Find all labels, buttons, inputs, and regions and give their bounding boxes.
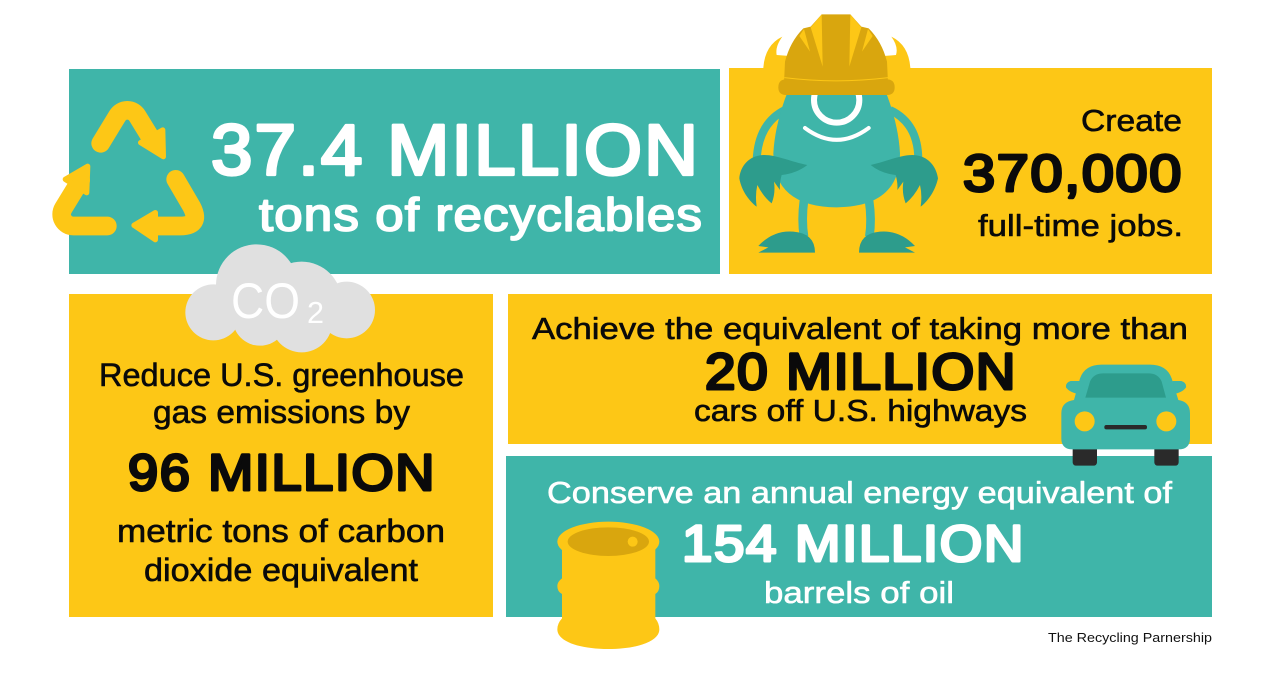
hard hat: [784, 14, 888, 83]
text: reduce emissions line 1: Reduce U.S. greenhouse: [99, 357, 464, 393]
text: conserve energy: Conserve an annual energy equivalent of: [547, 475, 1172, 510]
eye: [814, 77, 859, 123]
heading: 20 million: 20 MILLION: [705, 343, 1017, 400]
text: subscript 2: 2: [307, 295, 324, 330]
arms: [757, 110, 785, 160]
feet: [758, 232, 815, 253]
text: dioxide equivalent: dioxide equivalent: [144, 552, 418, 588]
hands: [739, 155, 807, 207]
text: tons of recyclables: tons of recyclables: [259, 188, 703, 240]
panel: recyclables: [62, 69, 720, 274]
text: metric tons: metric tons of carbon: [117, 513, 445, 549]
panel: cars: [508, 294, 1212, 444]
text: achieve the equivalent: Achieve the equivalent of taking more than: [532, 311, 1188, 346]
legs: [803, 200, 804, 237]
icon: oil barrel: [557, 522, 659, 649]
text: reduce emissions line 2: gas emissions by: [153, 394, 410, 430]
panel: jobs: [729, 68, 1212, 274]
text: CO: CO: [231, 273, 300, 329]
grille: [1104, 425, 1147, 429]
horns: [763, 37, 790, 80]
panel: greenhouse gas: [69, 294, 493, 617]
heading: 370,000: 370,000: [963, 145, 1183, 203]
windshield: [1085, 373, 1166, 398]
text: create: Create: [1081, 103, 1182, 138]
text: full-time jobs: full-time jobs.: [978, 208, 1183, 243]
text: barrels of oil: barrels of oil: [764, 575, 954, 610]
mirrors: [1066, 381, 1082, 395]
body: [773, 90, 900, 207]
panel: energy: [506, 456, 1212, 617]
icon: car: [1061, 365, 1190, 466]
heading: 96 million: 96 MILLION: [128, 444, 436, 501]
icon: recycling arrows: [62, 110, 195, 240]
source credit: The Recycling Parnership: [1048, 630, 1212, 645]
heading: 37.4 million: 37.4 MILLION: [211, 112, 700, 190]
text: cars off highways: cars off U.S. highways: [694, 393, 1027, 428]
headlights: [1075, 411, 1095, 431]
wheels: [1073, 443, 1097, 466]
icon: CO2 cloud: [185, 244, 375, 352]
icon: monster in hard hat: [739, 14, 938, 253]
heading: 154 million: 154 MILLION: [682, 515, 1025, 572]
body: [1061, 365, 1190, 449]
mouth: [805, 128, 869, 140]
